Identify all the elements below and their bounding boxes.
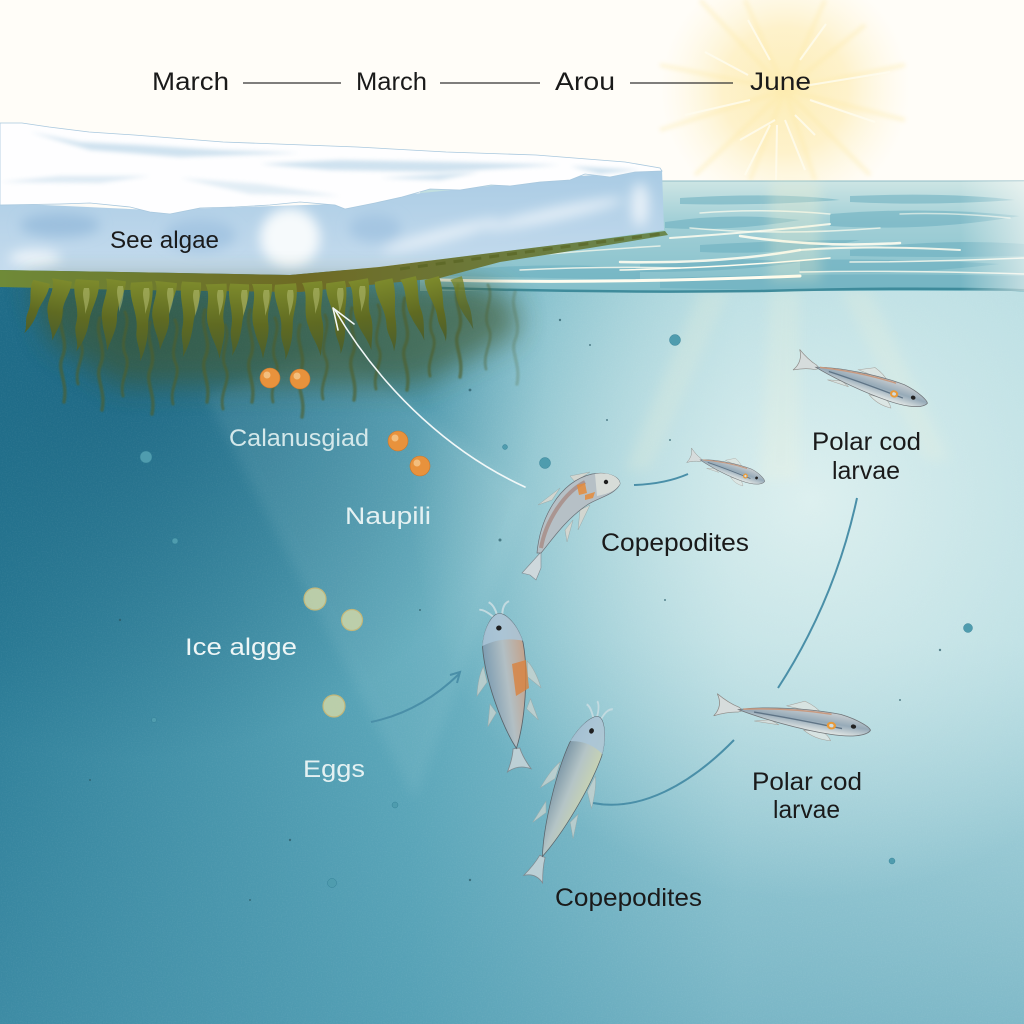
eggs and nauplii bbox=[260, 368, 430, 717]
label: Polar cod larvae top bbox=[812, 428, 921, 485]
arrow: larvae up to polar cod bbox=[778, 498, 857, 688]
label: Ice algge: Ice algge bbox=[185, 634, 297, 661]
fish: small larva bbox=[685, 444, 769, 492]
label: Polar cod larvae lower: larvae bbox=[773, 796, 840, 824]
white arrow to algae bbox=[333, 308, 525, 487]
label: Copepodites upper: Copepodites bbox=[601, 529, 749, 557]
background sky bbox=[0, 0, 1024, 290]
label: Polar cod larvae top: Polar cod bbox=[812, 428, 921, 456]
label: Eggs: Eggs bbox=[303, 756, 365, 783]
timeline label: March: March bbox=[152, 68, 229, 96]
egg highlights bbox=[264, 372, 420, 466]
hanging strands bbox=[60, 285, 518, 417]
sun with rays bbox=[660, 0, 910, 215]
timeline label: June: June bbox=[750, 68, 811, 96]
fish: upper copepodite bbox=[522, 472, 620, 580]
ice algae fronds bbox=[0, 231, 668, 417]
arrow: eggs to copepodite bbox=[371, 672, 460, 722]
label: Polar cod larvae top: larvae bbox=[832, 457, 900, 485]
ice floe bbox=[0, 123, 664, 275]
pale eggs bbox=[304, 588, 362, 717]
label: Polar cod larvae lower: Polar cod bbox=[752, 768, 862, 796]
ice face mottling bbox=[9, 183, 649, 268]
orange gut on vertical fish bbox=[512, 660, 529, 696]
timeline label: Arou: Arou bbox=[555, 68, 615, 96]
timeline label: March: March bbox=[356, 68, 427, 96]
open sea surface bbox=[420, 181, 1024, 292]
dark specks in water bbox=[89, 319, 941, 901]
ice top snow surface bbox=[0, 123, 662, 214]
arrow: copepodite to small fish bbox=[634, 474, 688, 485]
timeline bbox=[152, 68, 811, 96]
fish: polar cod larva lower bbox=[713, 687, 873, 747]
pale beam through dark water bbox=[205, 345, 530, 800]
algae band under the ice bbox=[0, 231, 668, 292]
fish: lower copepodite bbox=[508, 694, 630, 889]
dark algae shadow bbox=[30, 282, 518, 385]
ice front face bbox=[0, 170, 664, 275]
band rope texture bbox=[400, 234, 660, 269]
label: Copepodites lower: Copepodites bbox=[555, 884, 702, 912]
orange nauplii bbox=[260, 368, 430, 476]
algae fronds bbox=[20, 276, 479, 362]
sun beams in water bbox=[625, 290, 950, 480]
label: Polar cod larvae lower bbox=[752, 768, 862, 824]
label: Nauplii: Naupili bbox=[345, 503, 431, 530]
bubbles bbox=[140, 334, 972, 888]
arrow: larvae to copepodite bbox=[593, 740, 734, 805]
label: See algae: See algae bbox=[110, 227, 219, 254]
label: Calanusgiad: Calanusgiad bbox=[229, 425, 369, 452]
underwater background bbox=[0, 270, 1024, 1024]
fish: polar cod top right bbox=[791, 344, 933, 418]
fish: vertical copepodite bbox=[465, 597, 551, 775]
snow shading bbox=[0, 132, 640, 196]
